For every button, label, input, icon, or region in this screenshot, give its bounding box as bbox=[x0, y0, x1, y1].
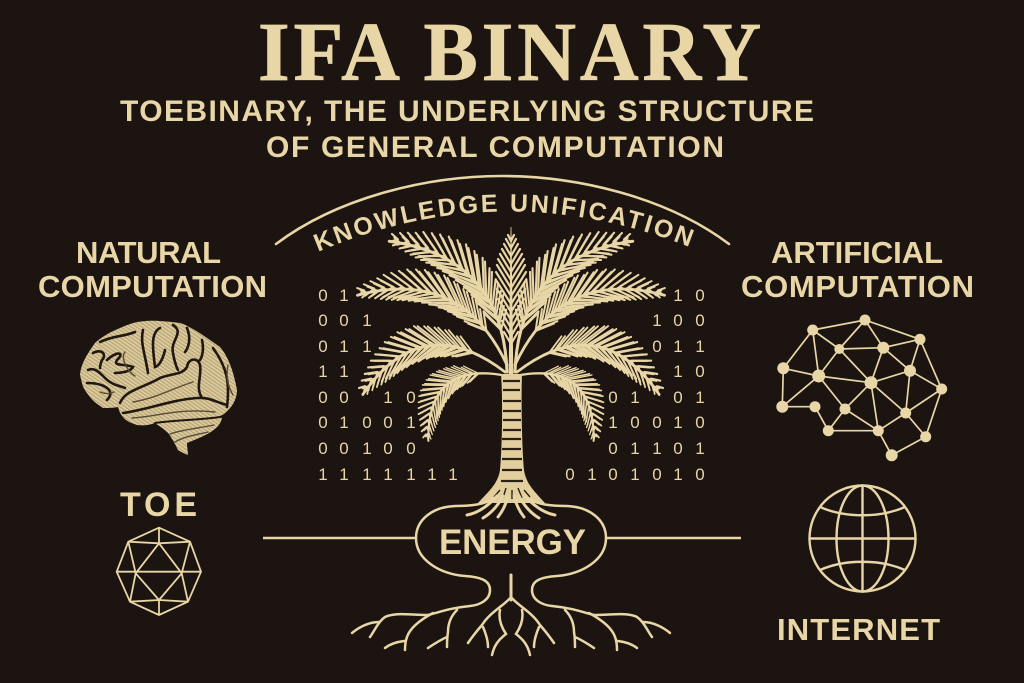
label: artificial computation: COMPUTATION bbox=[741, 269, 974, 304]
label: internet: INTERNET bbox=[777, 612, 940, 647]
label: natural computation bbox=[38, 235, 267, 304]
binary digits: right block: 10 bbox=[673, 362, 705, 381]
icon: globe bbox=[810, 486, 916, 592]
binary digits: left block: 1111111 bbox=[318, 465, 458, 484]
palm fronds: right side bbox=[472, 200, 671, 442]
binary digits: left block: 001 bbox=[318, 311, 372, 330]
label: artificial computation: ARTIFICIAL bbox=[771, 235, 943, 270]
subtitle bbox=[120, 95, 814, 164]
energy bubble and roots: left half bbox=[352, 496, 511, 655]
root flare detail bbox=[494, 488, 530, 499]
binary digits: left block bbox=[318, 286, 458, 484]
binary digits: left block: 11 bbox=[318, 362, 349, 381]
icon: brain bbox=[80, 321, 237, 455]
label: toe: TOE bbox=[120, 486, 197, 524]
palm tree bbox=[351, 200, 671, 503]
binary digits: left block: 00100 bbox=[318, 439, 416, 458]
binary digits: right block bbox=[565, 286, 705, 484]
connector line: right bbox=[607, 537, 741, 539]
energy node with roots bbox=[352, 496, 670, 655]
label: natural computation: COMPUTATION bbox=[38, 269, 267, 304]
binary digits: left block: 0010 bbox=[318, 388, 416, 407]
center taproot bbox=[510, 575, 512, 600]
label: natural computation: NATURAL bbox=[76, 235, 221, 270]
binary digits: right block: 011 bbox=[652, 337, 705, 356]
label: energy: ENERGY bbox=[439, 523, 586, 562]
subtitle: TOEBINARY, THE UNDERLYING STRUCTURE bbox=[120, 95, 814, 128]
connector line: left bbox=[263, 537, 416, 539]
binary digits: left block: 011 bbox=[318, 337, 372, 356]
title: IFA BINARY bbox=[258, 6, 765, 99]
knowledge unification label: KNOWLEDGE UNIFICATION bbox=[313, 194, 694, 252]
trunk stripes bbox=[501, 381, 523, 481]
subtitle: OF GENERAL COMPUTATION bbox=[266, 131, 724, 164]
binary digits: left block: 01 bbox=[318, 286, 349, 305]
central frond spine bbox=[509, 227, 513, 378]
icon: polyhedron bbox=[117, 528, 201, 615]
palm fronds: left side bbox=[351, 200, 550, 442]
binary digits: right block: 0101010 bbox=[565, 465, 705, 484]
icon: neural network bbox=[776, 314, 947, 461]
binary digits: right block: 10010 bbox=[608, 413, 705, 432]
binary digits: left block: 01001 bbox=[318, 413, 416, 432]
knowledge unification arc bbox=[276, 176, 729, 244]
binary digits: right block: 0101 bbox=[608, 388, 705, 407]
binary digits: right block: 10 bbox=[673, 286, 705, 305]
binary digits: right block: 01101 bbox=[608, 439, 705, 458]
trunk bbox=[478, 374, 545, 503]
energy bubble and roots: right half bbox=[511, 496, 670, 655]
binary digits: right block: 100 bbox=[652, 311, 705, 330]
label: artificial computation bbox=[741, 235, 974, 304]
